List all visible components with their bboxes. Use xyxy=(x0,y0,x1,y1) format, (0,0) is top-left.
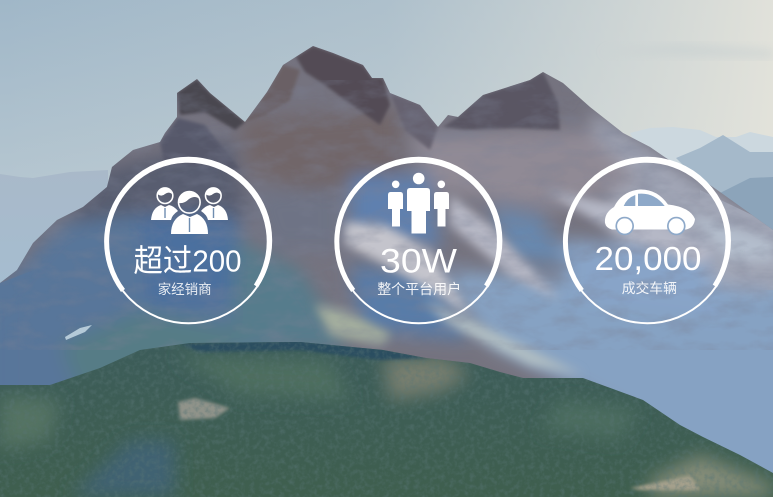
panel: users xyxy=(336,158,501,323)
icon: three business people xyxy=(151,188,228,234)
panel: dealers xyxy=(106,158,271,323)
stat: user count: 30W xyxy=(380,242,457,280)
ring: cars sold xyxy=(565,158,730,323)
ring: dealers xyxy=(106,158,271,323)
label: dealers: 家经销商 xyxy=(158,281,212,297)
stat: cars sold count: 20,000 xyxy=(594,241,702,278)
panel: cars sold xyxy=(565,158,730,323)
icon: car xyxy=(605,189,695,235)
stat: dealer count: 超过200 xyxy=(134,244,242,278)
label: cars sold: 成交车辆 xyxy=(622,280,677,296)
icon: three standing people xyxy=(388,173,449,234)
label: users: 整个平台用户 xyxy=(377,281,461,297)
ring: users xyxy=(336,158,501,323)
